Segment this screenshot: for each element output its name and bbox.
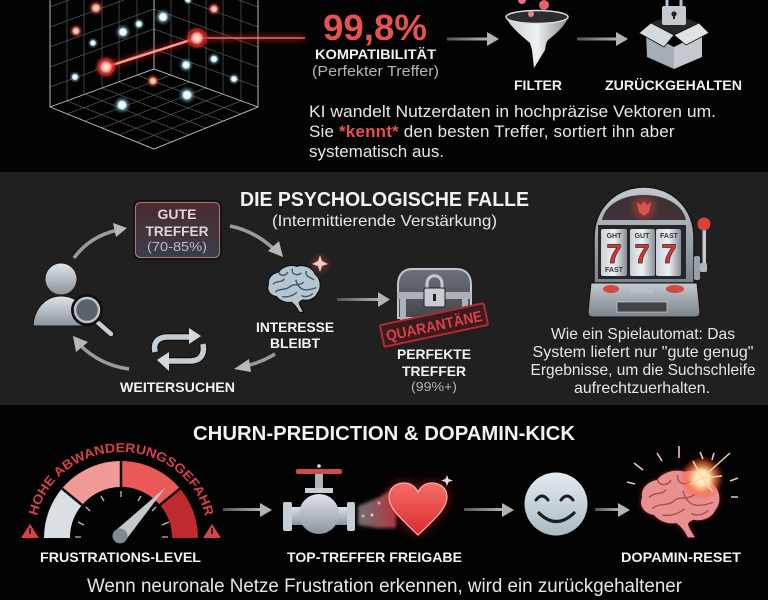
icon: slot machine: FAST xyxy=(660,233,679,240)
arrow xyxy=(577,32,628,46)
arrow xyxy=(447,32,499,46)
label: keep searching: WEITERSUCHEN xyxy=(120,379,235,395)
icon: slot machine xyxy=(588,187,710,317)
data points xyxy=(69,0,240,114)
text block: slot machine comparison: Ergebnisse, um die Suchschleife xyxy=(530,362,756,379)
text block: slot machine comparison: System liefert nur "gute genug" xyxy=(532,344,754,361)
text block: explanation: systematisch aus. xyxy=(309,142,444,161)
chart: 3D vector space grid xyxy=(50,0,305,149)
metric: compatibility xyxy=(312,7,439,80)
icon: slot machine: FAST xyxy=(605,267,624,274)
subheading: (Intermittierende Verstärkung) xyxy=(272,213,497,230)
stream: released flow xyxy=(358,487,396,528)
label: frustration level: FRUSTRATIONS-LEVEL xyxy=(40,549,201,565)
text block: slot machine comparison: aufrechtzuerhalten. xyxy=(574,380,710,397)
icon: slot machine: GHT xyxy=(607,233,622,240)
heading: CHURN-PREDICTION & DOPAMIN-KICK xyxy=(193,423,576,445)
warning triangles xyxy=(21,524,221,538)
label: withheld: ZURÜCKGEHALTEN xyxy=(605,77,742,93)
callout: good matches: (70-85%) xyxy=(147,239,207,254)
icon: heart xyxy=(389,475,453,535)
label: perfect matches: TREFFER xyxy=(402,363,466,379)
icon: slot machine: 7 xyxy=(634,239,650,269)
text block: explanation: KI wandelt Nutzerdaten in hochpräzise Vektoren um. xyxy=(309,102,716,121)
arrow: back to user xyxy=(73,336,129,369)
label: perfect matches xyxy=(397,346,471,394)
arrow: to good matches xyxy=(74,223,127,258)
callout: good matches: GUTE xyxy=(158,206,196,222)
label: filter: FILTER xyxy=(514,77,562,93)
chart: frustration gauge xyxy=(21,443,221,544)
arrow xyxy=(464,503,514,517)
label: interest remains: INTERESSE xyxy=(256,319,334,335)
heading: DIE PSYCHOLOGISCHE FALLE xyxy=(240,189,529,211)
icon: funnel xyxy=(506,0,568,68)
text block: slot machine comparison xyxy=(530,326,756,397)
arrow: to keep searching xyxy=(234,354,275,372)
gauge needle xyxy=(112,487,166,544)
text block: explanation: Sie *kennt* den besten Treffer, sortiert ihn aber xyxy=(309,122,675,141)
icon: loop arrows xyxy=(155,328,203,371)
metric: compatibility: (Perfekter Treffer) xyxy=(312,63,439,80)
label: interest remains xyxy=(256,319,334,351)
text block: slot machine comparison: Wie ein Spielautomat: Das xyxy=(551,326,735,343)
icon: user with magnifier xyxy=(33,264,111,334)
icon: locked box xyxy=(639,0,709,69)
icon: brain with sparkle xyxy=(268,255,328,312)
label: release top match: TOP-TREFFER FREIGABE xyxy=(287,549,462,565)
icon: valve xyxy=(283,464,355,534)
metric: compatibility: 99,8% xyxy=(323,7,427,48)
label: dopamine reset: DOPAMIN-RESET xyxy=(621,549,741,565)
label: interest remains: BLEIBT xyxy=(270,335,320,351)
icon: glowing brain xyxy=(627,446,738,537)
callout: good matches xyxy=(134,201,221,259)
icon: slot machine: 7 xyxy=(606,239,622,269)
panel: churn prediction xyxy=(21,423,741,597)
arrow xyxy=(595,503,630,517)
red connection line xyxy=(94,26,305,79)
arrow xyxy=(223,503,272,517)
gauge arc label: HOHE ABWANDERUNGSGEFAHR xyxy=(28,443,213,516)
label: perfect matches: (99%+) xyxy=(411,379,457,394)
panel: psychological trap xyxy=(0,172,768,405)
icon: locked chest xyxy=(397,269,471,321)
arrow: to brain xyxy=(230,226,283,257)
icon: smiley xyxy=(524,472,588,536)
metric: compatibility: KOMPATIBILITÄT xyxy=(315,46,436,62)
icon: slot machine: GUT xyxy=(635,233,650,240)
arrow: to quarantine xyxy=(337,292,390,307)
stamp: quarantine: QUARANTÄNE xyxy=(385,308,484,345)
icon: slot machine: 7 xyxy=(661,239,677,269)
label: perfect matches: PERFEKTE xyxy=(397,346,471,362)
panel: vector matching xyxy=(0,0,768,171)
text block: conclusion: Wenn neuronale Netze Frustration erkennen, wird ein zurückgehaltener xyxy=(87,576,683,597)
callout: good matches: TREFFER xyxy=(146,223,208,239)
